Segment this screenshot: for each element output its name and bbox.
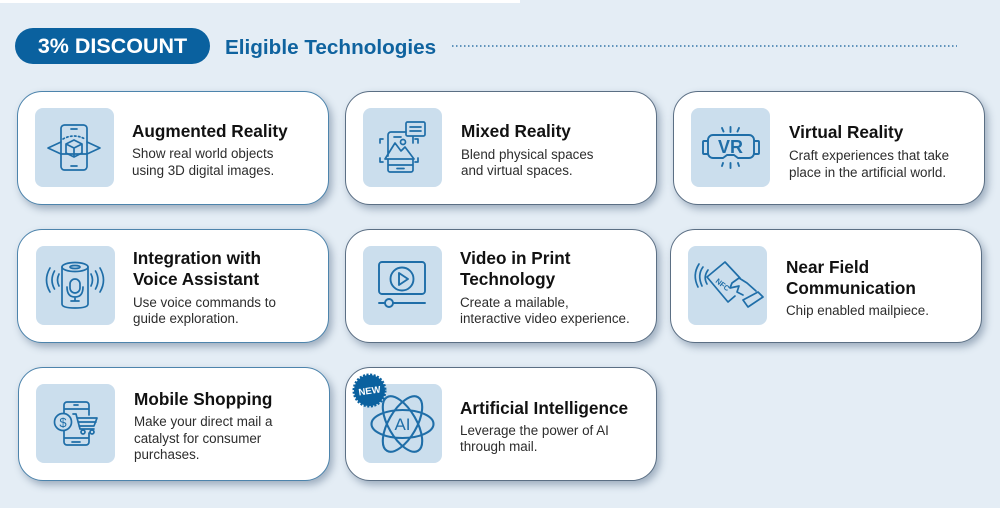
- text: Near Field Communication: Near Field: [786, 256, 869, 276]
- icon: mobile shopping: $: [59, 415, 67, 430]
- text: Mixed Reality: [461, 121, 594, 178]
- icon: augmented reality phone: [35, 108, 114, 187]
- text: Video in Print Technology: Create a mailable,: [460, 294, 569, 310]
- text: Artificial Intelligence: Leverage the power of AI: [460, 422, 609, 438]
- text: Mixed Reality: and virtual spaces.: [461, 163, 573, 178]
- text: Virtual Reality: [789, 122, 949, 180]
- panel: Artificial Intelligence: [345, 367, 657, 481]
- panel: Video in Print Technology: [345, 229, 657, 343]
- discount pill: [15, 28, 210, 64]
- panel: Mobile Shopping: [18, 367, 330, 481]
- panel: Virtual Reality: [673, 91, 985, 205]
- icon: VR headset: [691, 108, 770, 187]
- icon: voice assistant speaker: [36, 246, 114, 325]
- text: Augmented Reality: Augmented Reality: [132, 121, 288, 141]
- text: Mobile Shopping: Mobile Shopping: [134, 389, 272, 409]
- text: Mobile Shopping: catalyst for consumer: [134, 430, 261, 446]
- text: Artificial Intelligence: [460, 398, 628, 454]
- text: Video in Print Technology: interactive video experience.: [460, 311, 630, 326]
- text: Near Field Communication: [786, 256, 929, 318]
- badge: NEW: [352, 374, 386, 408]
- heading: Eligible Technologies: Eligible Technologies: [225, 36, 436, 59]
- text: Mobile Shopping: purchases.: [134, 447, 200, 462]
- text: Virtual Reality: Virtual Reality: [789, 122, 903, 142]
- text: Virtual Reality: place in the artificial world.: [789, 164, 946, 180]
- badge: NEW: NEW: [357, 384, 381, 398]
- text: Near Field Communication: Communication: [786, 278, 916, 298]
- icon: AI atom: AI: [394, 415, 411, 434]
- text: Mixed Reality: Mixed Reality: [461, 121, 571, 141]
- text: Artificial Intelligence: through mail.: [460, 439, 537, 454]
- icon: VR headset: VR: [718, 137, 743, 157]
- text: Augmented Reality: using 3D digital images.: [132, 162, 274, 178]
- discount pill: 3% DISCOUNT: [38, 34, 187, 58]
- text: Video in Print Technology: [460, 248, 630, 326]
- text: Virtual Reality: Craft experiences that take: [789, 148, 949, 163]
- text: Mobile Shopping: Make your direct mail a: [134, 414, 272, 429]
- text: Augmented Reality: Show real world objects: [132, 146, 273, 161]
- text: Integration with Voice Assistant: guide exploration.: [133, 311, 239, 326]
- text: Integration with Voice Assistant: Use voice commands to: [133, 294, 276, 310]
- panel: Near Field Communication: [670, 229, 982, 343]
- text: Mixed Reality: Blend physical spaces: [461, 146, 594, 162]
- text: Artificial Intelligence: Artificial Intelligence: [460, 398, 628, 418]
- icon: NFC card in hand: NFC: [714, 276, 732, 293]
- icon: video player: [363, 246, 442, 325]
- text: Video in Print Technology: Video in Print: [460, 248, 570, 268]
- text: Near Field Communication: Chip enabled mailpiece.: [786, 302, 929, 318]
- icon: mixed reality: [363, 108, 442, 187]
- text: Video in Print Technology: Technology: [460, 269, 555, 289]
- panel: Mixed Reality: [345, 91, 657, 205]
- text: Integration with Voice Assistant: [133, 248, 276, 326]
- text: Integration with Voice Assistant: Integration with: [133, 248, 261, 268]
- text: Augmented Reality: [132, 121, 288, 178]
- text: Mobile Shopping: [134, 389, 272, 462]
- icon: AI atom: [363, 384, 442, 463]
- text: Integration with Voice Assistant: Voice Assistant: [133, 269, 259, 289]
- icon: NFC card in hand: [688, 246, 767, 325]
- icon: mobile shopping: [36, 384, 115, 463]
- panel: Integration with Voice Assistant: [17, 229, 329, 343]
- panel: Augmented Reality: [17, 91, 329, 205]
